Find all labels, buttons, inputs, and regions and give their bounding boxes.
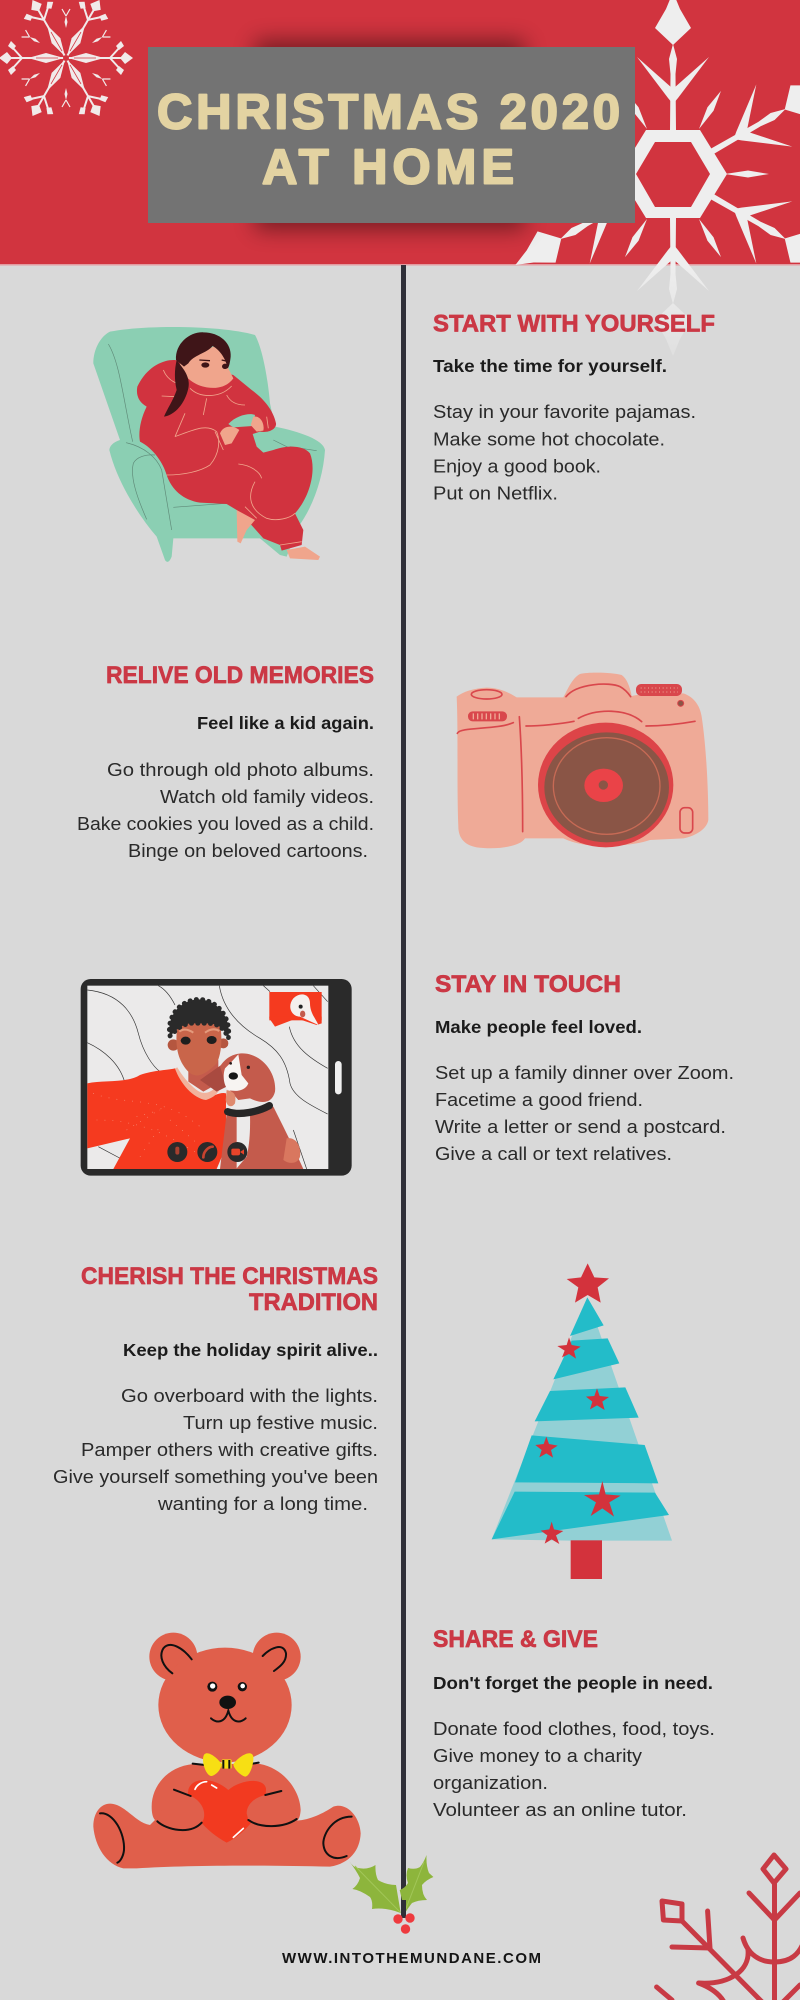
text block: start with yourself: Stay in your favorite pajamas. [433,401,696,422]
icon: small snowflake top left [0,0,133,125]
icon: red snowflake bottom right [657,1855,800,2000]
icon: person in armchair [93,327,325,562]
text block: share and give: Donate food clothes, food, toys. [433,1718,715,1739]
text block: cherish the christmas tradition: Turn up festive music. [183,1412,378,1433]
icon: tablet video call [81,979,352,1176]
heading: relive old memories: RELIVE OLD MEMORIES [106,662,374,689]
icon: christmas tree [492,1263,672,1579]
title: AT HOME [262,140,514,194]
center timeline line [401,265,406,1918]
text block: relive old memories: Bake cookies you loved as a child. [77,813,374,834]
text block: stay in touch: Write a letter or send a postcard. [435,1116,726,1137]
text block: cherish the christmas tradition [53,1263,378,1514]
text block: share and give: organization. [433,1772,548,1793]
heading: cherish the christmas tradition: CHERISH THE CHRISTMAS [81,1263,378,1290]
text block: start with yourself: Enjoy a good book. [433,456,601,476]
text block: relive old memories: Binge on beloved cartoons. [128,840,368,861]
icon: large snowflake top right [497,0,800,365]
heading: cherish the christmas tradition: TRADITION [249,1289,378,1316]
text block: start with yourself: Take the time for yourself. [433,356,667,376]
heading: cherish the christmas tradition [81,1263,378,1316]
text block: stay in touch: Give a call or text relatives. [435,1143,672,1164]
text block: share and give: Volunteer as an online tutor. [433,1799,687,1820]
text block: stay in touch [435,971,734,1164]
text block: share and give [433,1626,715,1820]
text block: share and give: Don't forget the people in need. [433,1673,713,1693]
text block: relive old memories: Watch old family videos. [160,786,374,807]
header band [0,0,800,266]
heading: stay in touch: STAY IN TOUCH [435,971,621,998]
text block: relive old memories: Go through old photo albums. [107,759,374,780]
hair braid [164,360,189,417]
title: CHRISTMAS 2020 [157,86,620,140]
text block: start with yourself: Put on Netflix. [433,482,558,504]
text block: cherish the christmas tradition: Go overboard with the lights. [121,1385,378,1406]
icon: teddy bear with heart [93,1633,361,1868]
title [157,86,620,194]
text block: start with yourself: Make some hot chocolate. [433,428,665,450]
text block: cherish the christmas tradition: Give yourself something you've been [53,1466,378,1487]
text block: cherish the christmas tradition: wanting for a long time. [157,1493,368,1514]
icon: holly with berries [349,1855,433,1934]
heading: start with yourself: START WITH YOURSELF [433,310,715,338]
text block: share and give: Give money to a charity [433,1745,643,1766]
text block: stay in touch: Facetime a good friend. [435,1089,643,1110]
heading: share and give: SHARE & GIVE [433,1626,598,1653]
text block: start with yourself [433,310,715,504]
text block: relive old memories [77,662,374,861]
icon: camera [457,673,708,848]
footer website: WWW.INTOTHEMUNDANE.COM [282,1950,541,1967]
text block: cherish the christmas tradition: Pamper others with creative gifts. [81,1439,378,1460]
text block: stay in touch: Make people feel loved. [435,1017,642,1037]
text block: stay in touch: Set up a family dinner over Zoom. [435,1062,734,1083]
text block: relive old memories: Feel like a kid again. [197,713,374,733]
text block: cherish the christmas tradition: Keep the holiday spirit alive.. [123,1340,378,1360]
title panel [148,40,635,230]
